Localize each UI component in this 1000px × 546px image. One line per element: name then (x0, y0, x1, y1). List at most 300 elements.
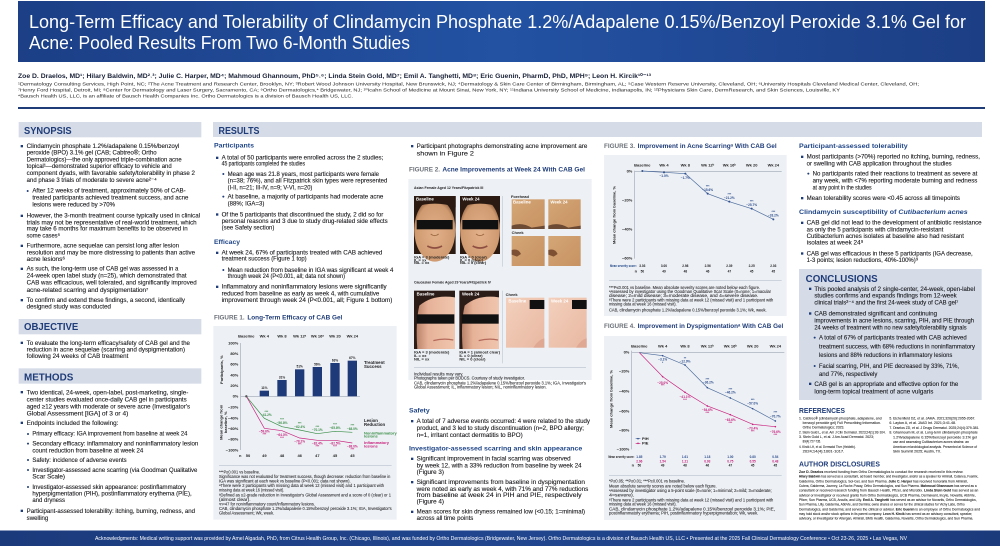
footnotes: figure 3: CAB, clindamycin phosphate 1.2%/adapalene 0.15%/benzoyl peroxide 3.1%; Wk, week. (609, 308, 767, 313)
text block: author disclosures: Zoe D. Draelos received funding from Ortho Dermatologics to conduct the research received in this review. (799, 469, 963, 474)
photo: face week 24: Week 24 (462, 197, 480, 202)
footnotes: figure 1: ***P≤0.001 vs baseline. (219, 469, 260, 474)
footnotes: figure 2 (414, 372, 586, 389)
text block: references: 3. Stein Gold L, et al. J Am Acad Dermatol. 2023; (799, 435, 874, 439)
text block: synopsis bullets: some cases⁵ (27, 233, 60, 240)
chart header: visit labels: Wk 4 (659, 163, 669, 168)
line chart: lesion reduction: *** (298, 422, 302, 426)
table: mean severity score: 3.03 (639, 264, 646, 268)
text block: synopsis bullets: CAB was efficacious, well tolerated, and significantly improved (27, 281, 197, 287)
chart header: visit labels: Wk 24 (347, 334, 359, 339)
line chart: lesion reduction: Reduction (364, 422, 386, 427)
text block: participants: (88%; IGA=3) (228, 201, 264, 207)
line chart: lesion reduction (218, 395, 398, 458)
table: mean severity score: 1.61 (682, 455, 688, 459)
line chart: dyspigmentation: *** (661, 384, 665, 388)
panel: results heading bar: RESULTS (218, 126, 260, 137)
line chart: dyspigmentation: *** (728, 421, 733, 425)
chart header: visit labels: Wk 16ᵃ (311, 334, 324, 339)
bar chart: treatment success: 40% (230, 372, 239, 377)
text block: author disclosures: may hold stock and/or stock options in its parent company. Leon H. Kircik has served as an advisory consultant, speaker, (799, 511, 972, 516)
text block: references: 5. Eichenfield DZ, et al. JAMA. 2021;326(20):2055-2067. (889, 417, 975, 421)
photo scores case 1: IL = 0 (clear) (460, 257, 484, 262)
line chart: acne scarring: *** (727, 193, 732, 197)
line chart: lesion reduction: n (239, 453, 242, 458)
line chart: lesion reduction: −70.1% (312, 428, 323, 432)
text block: participants: (I-II, n=21; III-IV, n=9; V-VI, n=20) (228, 186, 312, 192)
footnotes: figure 3: ᵃAssessed by investigator using the Goodman Qualitative Scar Scale (0=none; 1=macular (609, 289, 772, 294)
heading: figure 1: FIGURE 1. (214, 314, 245, 321)
text block: synopsis bullets: lesions were reduced by >70% (32, 203, 116, 209)
heading: figure 2: Acne Improvements at Week 24 With CAB Gel (442, 166, 585, 173)
line chart: lesion reduction: −100% (226, 447, 239, 452)
text block: scarring: (Figure 4) (417, 500, 444, 506)
text block: methods bullets: aged ≥12 years with moderate or severe acne (Investigator's (27, 404, 190, 410)
table: mean severity score: 50 (638, 463, 641, 467)
text block: conclusions bullets (809, 287, 975, 396)
panel: figure 3 (604, 143, 787, 330)
text block: references: 8. Ghannoum M, et al. Long-term clindamycin phosphate (889, 431, 978, 435)
photo crops: forehead and cheek (511, 194, 581, 266)
text block: synopsis bullets: 24-week open label study (n=25), which demonstrated that (27, 274, 187, 280)
text block: susceptibility: as only the 5 participants with clindamycin-resistant (807, 227, 944, 233)
text block: photographs bullet: shown in Figure 2 (417, 151, 475, 157)
text block: efficacy: Mean reduction from baseline in IGA was significant at week 4 (228, 268, 394, 274)
chart header: visit labels: Wk 12ᵃ (293, 334, 307, 339)
heading: author disclosures: AUTHOR DISCLOSURES (799, 462, 880, 469)
text block: synopsis bullets: trials may not be representative of real-world treatment, which (27, 220, 197, 226)
footnotes: figure 1: (almost clear). (219, 497, 251, 502)
footnotes: figure 4: 4=severe). (609, 492, 634, 497)
bar chart: treatment success: 100% (228, 340, 239, 345)
panel: methods (19, 368, 201, 522)
table: mean severity score: 2.56 (705, 264, 711, 268)
line chart: lesion reduction: *** (264, 410, 269, 414)
line chart: lesion reduction: −65.8% (330, 426, 341, 430)
text block: susceptibility: CAB gel was efficacious in these 5 participants (IGA decrease, (807, 251, 973, 257)
heading: conclusions: CONCLUSIONS (806, 274, 878, 285)
text block: tolerability: any week, with <7% reporting moderate burning and redness (813, 179, 977, 185)
line chart: dyspigmentation: −41.1% (680, 395, 691, 399)
photo scores case 2: NIL = 0 (clear) (459, 357, 486, 362)
affiliations: ¹Dermatology Consulting Services, High Point, NC; ²The Acne Treatment and Research Center, Brooklyn, NY; ³Robert Wood Johnson University Hospital, New Brunswick, NJ; ⁴Dermatology & Skin Care Center of Birmingham, Birmingham, AL; ⁵Case Western Reserve University, Cleveland, OH; ⁶University Hospitals Cleveland Medical Center, Cleveland, OH; (18, 82, 919, 86)
text block: tolerability: Most participants (>70%) reported no itching, burning, redness, (807, 155, 980, 161)
chart header: visit labels: Wk 8 (277, 334, 287, 339)
footnotes: figure 4: Mean absolute severity scores are noted below each figure. (609, 483, 717, 488)
text block: methods bullets: Global Assessment [IGA] of 3 or 4) (27, 412, 128, 418)
text block: author disclosures: Cutera, Galderma, Journey, La Roche-Posay, Ortho Dermatologics, and Sun Pharma. Mahmoud Ghannoum has served as a (799, 483, 977, 488)
text block: conclusions bullets: and 77%, respectively (819, 372, 877, 378)
text block: tolerability: at any point in the studies (813, 185, 872, 191)
line chart: acne scarring: −21.2% (724, 196, 735, 200)
text block: references: use and assessing Cutibacterium acnes strains: an (893, 440, 969, 444)
text block: author disclosures: Dermatologics, and Galderma; and serves the clinical or advisor. Eric Guenin is an employee of Ortho Dermatologics and (799, 506, 980, 511)
text block: methods bullets: Safety: incidence of adverse events (32, 458, 127, 464)
line chart: lesion reduction: Lesion (364, 418, 378, 423)
table: mean severity score: 49 (661, 463, 665, 467)
line chart: lesion reduction: 49 (262, 453, 267, 458)
table: mean severity score: Mean severity score: (608, 454, 634, 459)
text block: tolerability (801, 155, 980, 202)
line chart: lesion reduction: 45 (350, 453, 355, 458)
table: mean severity score: 0.80 (750, 455, 756, 459)
line chart: lesion reduction: −68.0% (347, 427, 358, 431)
text block: scarring: Mean scores for skin dryness remained low (<0.15; 1=minimal) (417, 510, 585, 516)
table: mean severity score: 50 (641, 269, 644, 273)
text block: methods bullets: center studies evaluated once-daily CAB gel in participants (27, 397, 187, 403)
text block: efficacy: through week 24 (P<0.001, all; data not shown) (228, 274, 345, 280)
table: mean severity score: 1.79 (660, 455, 666, 459)
text block: synopsis bullets: However, the 3-month treatment course typically used in clinical (27, 214, 200, 220)
line chart: lesion reduction: baseline, % (223, 411, 228, 433)
line chart: dyspigmentation: −20% (619, 368, 630, 373)
table: mean severity score: 48 (684, 269, 687, 273)
footnotes: figure 1 (219, 469, 392, 516)
line chart: dyspigmentation (608, 350, 784, 452)
photo scores case 2: NIL = xx (414, 357, 430, 362)
line chart: acne scarring: *** (750, 200, 754, 204)
photo crops: forehead and cheek: Cheek (512, 230, 524, 235)
text block: references: 6. Layton A, et al. JAAD Int. 2021;3:41-48. (889, 421, 956, 425)
line chart: dyspigmentation: −46.2% (725, 391, 736, 395)
text block: conclusions bullets: clinical trials²⁻⁴ and the first 24-week study of CAB gel⁷ (814, 300, 958, 307)
text block: participants: A total of 50 participants were enrolled across the 2 studies; (222, 156, 384, 162)
heading: safety: Safety (409, 408, 430, 415)
footer banner: Acknowledgments: Medical writing support was provided by Amel Algadah, PhD, from Citrus Health Group, Inc. (Chicago, Illinois), and was funded by Ortho Dermatologics (Bridgewater, New Jersey). Ortho Dermatologics is a division of Bausch Health US, LLC • Presented at the 2025 Fall Clinical Dermatology Conference • Oct 23-26, 2025 • Las Vegas, NV (95, 536, 907, 542)
text block: participants: At baseline, a majority of participants had moderate acne (228, 195, 384, 201)
text block: objective (21, 341, 191, 360)
heading: references: REFERENCES (799, 408, 845, 415)
text block: participants: personal reasons and 3 due to study drug-related side effects (222, 219, 388, 225)
footnotes: figure 4: postinflammatory erythema; PIH, postinflammatory hyperpigmentation; Wk, week. (609, 511, 758, 516)
text block: scarring: across all time points (417, 516, 473, 522)
chart header: visit labels: Wk 20 (747, 343, 759, 348)
text block: tolerability: No participants rated their reactions to treatment as severe at (813, 172, 978, 178)
text block: safety: product, and 3 led to study discontinuation (n=2, BPO allergy; (417, 426, 584, 432)
text block: tolerability: Mean tolerability scores were <0.45 across all timepoints (807, 196, 960, 202)
chart header: visit labels: Wk 24 (770, 343, 782, 348)
photo crops: forehead and cheek: Forehead (511, 194, 529, 199)
text block: methods bullets: swelling (27, 516, 48, 522)
line chart: lesion reduction: −60% (228, 426, 239, 431)
table: mean severity score: 45 (751, 463, 755, 467)
table: mean severity score: 1.00 (727, 455, 734, 459)
line chart: dyspigmentation: −73.4% (747, 426, 758, 430)
line chart: dyspigmentation: *** (773, 433, 778, 437)
line chart: acne scarring: −1.7% (681, 176, 690, 180)
table: mean severity score: 0.75 (727, 459, 734, 463)
chart header: visit labels: Wk 12ᵇ (701, 163, 715, 168)
photo scores case 2: IGA = 1 (almost clear) (459, 349, 501, 354)
photo: face week 24 (460, 196, 500, 262)
heading: scarring and skin appearance: Investigator-assessed scarring and skin appearance (409, 446, 583, 453)
line chart: lesion reduction: *** (333, 423, 338, 427)
footnotes: figure 2: CAB, clindamycin phosphate 1.2%/adapalene 0.15%/benzoyl peroxide 3.1%; IGA, Investigator's (414, 381, 586, 386)
text block: scarring: (Figure 3) (417, 470, 444, 476)
text block: safety: A total of 7 adverse events occurred: 4 were related to the study (417, 419, 590, 425)
text block: synopsis bullets: After 12 weeks of treatment, approximately 50% of CAB- (32, 189, 186, 195)
footnotes: figure 3: missing data at week 16 (missed visit). (609, 301, 677, 306)
photo scores case 2: IGA = 3 (moderate) (414, 349, 450, 354)
photo scores case 1 (414, 255, 487, 265)
text block: conclusions bullets: studies confirms and expands findings from 12-week (814, 294, 957, 300)
line chart: dyspigmentation: 0% (624, 350, 630, 355)
text block: references: 89(4):727-735. (803, 440, 821, 444)
table: mean severity score: 2.98 (682, 264, 689, 268)
footnotes: figure 1: Global Assessment; Wk, week. (219, 511, 274, 516)
line chart: lesion reduction: *** (315, 445, 320, 449)
bar chart: treatment success: 31% (279, 375, 285, 379)
table: mean severity score: Mean severity score: (610, 263, 637, 268)
line chart: acne scarring: −33.2% (768, 213, 779, 217)
text block: author disclosures: consultant or received research funding from Bausch Health, Pfizer, and Microbix. Linda Stein Gold has served as an (799, 488, 978, 493)
text block: objective: reduction in acne sequelae (scarring and dyspigmentation) (27, 347, 185, 353)
photo scores case 1: NIL = 0 (clear) (460, 260, 487, 265)
line chart: lesion reduction: 47 (315, 453, 320, 458)
text block: synopsis bullets: peroxide (BPO) 3.1% gel (CAB; Cabtreo®; Ortho (27, 149, 157, 156)
legend: PIH and PIE: PIE (642, 441, 649, 446)
table: mean severity score: 3.00 (661, 264, 667, 268)
text block: efficacy: reduced from baseline as early as week 4, with cumulative (222, 291, 380, 297)
text block: methods bullets: Secondary efficacy: inflammatory and noninflammatory lesion (32, 442, 198, 448)
footnotes: figure 2: Individual results may vary. (414, 372, 463, 377)
text block: conclusions bullets: CAB gel is an appropriate and effective option for the (814, 382, 959, 388)
photo: face baseline (414, 196, 456, 262)
text block: references: Skin Summit 2025; Austin, TX. (893, 449, 941, 453)
text block: conclusions bullets: treatment success, with 68% reductions in noninflammatory (819, 345, 975, 351)
text block: author disclosures: Galderma, Ortho Dermatologics, Sol-Gel, and Sun Pharma. Julie C. Harper has received honoraria from Almirall, (799, 478, 968, 483)
text block: efficacy: treatment success (Figure 1 top) (222, 257, 307, 263)
line chart: dyspigmentation: *** (705, 411, 710, 415)
panel: synopsis (19, 122, 201, 310)
line chart: lesion reduction: −88.0% (347, 445, 358, 449)
line chart: dyspigmentation: *** (751, 398, 755, 402)
footnotes: figure 2: Global Assessment; IL, inflammatory lesion; NIL, noninflammatory lesion. (414, 384, 547, 389)
text block: scarring: Significant improvement in facial scarring was observed (417, 457, 571, 463)
bar chart: treatment success: 63% (332, 358, 338, 362)
text block: conclusions bullets: Facial scarring, PIH, and PIE decreased by 33%, 71%, (819, 364, 959, 370)
title: Acne: Pooled Results From Two 6-Month Studies (29, 33, 410, 53)
text block: references: 1.2%/adapalene 0.15%/benzoyl peroxide 3.1% gel (893, 436, 977, 440)
photo crops: cheek case 2: Week 24 (551, 299, 569, 304)
heading: synopsis: SYNOPSIS (24, 126, 72, 137)
chart header: visit labels (634, 163, 780, 168)
text block: objective: following 24 weeks of CAB treatment (27, 354, 129, 360)
line chart: dyspigmentation: ** (684, 356, 687, 360)
line chart: acne scarring: −20% (622, 198, 633, 203)
text block: photographs bullet: Participant photographs demonstrating acne improvement are (417, 144, 588, 150)
line chart: dyspigmentation: −70.7% (770, 414, 781, 418)
text block: synopsis bullets: As such, the long-term use of CAB gel was assessed in a (27, 267, 179, 273)
photo scores case 1: IL = xx (414, 257, 427, 262)
line chart: dyspigmentation: *** (728, 387, 733, 391)
photo case 2 (414, 280, 587, 363)
line chart: lesion reduction: *** (350, 448, 355, 452)
text block: scarring (411, 457, 588, 522)
line chart: acne scarring: *** (771, 210, 776, 214)
text block: references: Ortho Dermatologics; 2023. (803, 426, 844, 430)
table: mean severity score: 1.18 (704, 455, 711, 459)
footnotes: figure 1: missing data at week 16 (missed visit). (219, 488, 284, 493)
line chart: acne scarring: Mean change from baseline, % (612, 186, 617, 244)
line chart: dyspigmentation: −36.2% (703, 381, 714, 385)
panel: objective (19, 319, 201, 360)
line chart: lesion reduction: 50 (246, 453, 251, 458)
photo: profile week 24 (459, 291, 499, 349)
text block: references: American microbiological analysis. Presented at Science of (893, 445, 978, 449)
heading: objective: OBJECTIVE (24, 322, 79, 333)
legend: PIH and PIE (636, 436, 649, 446)
panel: conclusions (799, 269, 982, 400)
text block: conclusions bullets: 24 weeks of treatment with no new safety/tolerability signals (814, 326, 967, 332)
line chart: dyspigmentation: *** (683, 398, 688, 402)
bar chart: treatment success: Participants, % (219, 355, 224, 384)
line chart: lesion reduction: Inflammatory (364, 440, 390, 445)
panel: tolerability and susceptibility (799, 143, 982, 264)
text block: synopsis bullets: acne-related scarring and dyspigmentation⁷ (27, 287, 148, 294)
text block: methods bullets (21, 390, 198, 522)
line chart: lesion reduction: −20% (228, 404, 239, 409)
line chart: acne scarring: −15.6% (702, 188, 713, 192)
table: mean severity score: 2.06 (636, 459, 643, 463)
line chart: dyspigmentation: −12.9% (680, 360, 691, 364)
photo scores case 2 (414, 349, 501, 362)
panel: figure 4 (604, 336, 787, 520)
heading: tolerability: Participant-assessed tolerability (799, 143, 908, 150)
heading: figure 3: Improvement in Acne Scarringᵃ With CAB Gel (638, 143, 777, 150)
table: mean severity score (610, 263, 777, 273)
bar chart: treatment success: 0% (233, 394, 239, 399)
text block: synopsis bullets: acne lesions⁶ (27, 256, 66, 263)
chart header: visit labels: Baseline (238, 334, 255, 339)
line chart: dyspigmentation: −60% (619, 408, 630, 413)
text block: synopsis bullets: treated participants achieved treatment success, and acne (32, 196, 189, 202)
table: mean severity score: 1.85 (636, 455, 643, 459)
table: mean severity score: 2.25 (749, 264, 755, 268)
table: mean severity score: 0.55 (750, 459, 756, 463)
bar chart: treatment success: Treatment (364, 360, 385, 365)
text block: methods bullets: Endpoints included the following: (27, 421, 119, 427)
table: mean severity score: 1.54 (660, 459, 666, 463)
line chart: lesion reduction: 46 (297, 453, 303, 458)
chart header: visit labels: Wk 4 (658, 343, 668, 348)
text block: methods bullets: Two identical, 24-week, open-label, post-marketing, single- (27, 390, 188, 396)
photo crops: cheek case 2: Cheek (506, 292, 518, 297)
panel: safety and scarring (409, 408, 590, 522)
footnotes: figure 2: Photographs taken per BDDCS. Courtesy of study investigator. (414, 376, 525, 381)
text block: photographs bullet (411, 144, 588, 157)
text block: susceptibility: isolates at week 24⁹ (807, 240, 864, 247)
table: mean severity score: 49 (662, 269, 666, 273)
chart header: visit labels: Wk 12ᵇ (701, 343, 714, 348)
footnotes: figure 4: ᵇThere were 2 participants with missing data at week 12 (missed visit) and 1 participant with (609, 497, 774, 502)
table: mean severity score: 2.03 (770, 264, 777, 268)
line chart: lesion reduction: *** (280, 417, 285, 421)
authors (18, 72, 919, 98)
text block: methods bullets: and dryness (32, 498, 65, 504)
photo case 2: Caucasian Female Aged 29 Years/Fitzpatrick IV (414, 280, 491, 285)
line chart: dyspigmentation: −40% (619, 389, 630, 394)
footnotes: figure 3: disease; 2=mild disease; 3=moderate disease, and 4=severe disease. (609, 293, 758, 298)
text block: scarring: Significant improvements from baseline in dyspigmentation (417, 480, 585, 486)
chart header: visit labels: Wk 20 (329, 334, 342, 339)
footnotes: figure 3: ᵇThere were 2 participants with missing data at week 12 (missed visit) and 1 participant with (609, 297, 774, 302)
heading: participants: Participants (214, 143, 254, 150)
line chart: lesion reduction: −82.4% (312, 442, 323, 446)
text block: synopsis bullets: and phase 3 trials of moderate to severe acne²⁻⁴ (27, 177, 157, 184)
line chart: lesion reduction: −62.4% (294, 425, 305, 429)
chart header: visit labels (238, 334, 359, 339)
bar chart: treatment success: 80% (230, 351, 239, 356)
text block: conclusions bullets: CAB demonstrated significant and continuing (814, 312, 937, 318)
chart header: visit labels: Baseline (631, 343, 648, 348)
text block: participants: Mean age was 21.8 years, most participants were female (228, 172, 380, 178)
line chart: acne scarring: −60% (622, 256, 633, 261)
text block: author disclosures (799, 469, 980, 521)
text block: conclusions bullets: improvements in acne lesions, scarring, PIH, and PIE through (814, 319, 974, 325)
heading: methods: METHODS (24, 372, 74, 383)
line chart: lesion reduction: *** (333, 445, 338, 449)
footnotes: figure 1: ᵃThere were 2 participants with missing data at week 12 (missed visit) and 1 participant with (219, 483, 385, 488)
text block: efficacy: improvement through week 24 (P<0.001, all; Figure 1 bottom) (222, 298, 392, 304)
table: mean severity score: 46 (706, 269, 710, 273)
chart header: visit labels (631, 343, 782, 348)
line chart: lesion reduction: 48 (280, 453, 285, 458)
footnotes: figure 4: missing data at week 16 (missed visit). (609, 502, 677, 507)
line chart: lesion reduction: −78.2% (294, 440, 305, 444)
line chart: lesion reduction: lesions (364, 444, 379, 449)
bar chart: treatment success: Success (364, 364, 382, 369)
heading: figure 3: FIGURE 3. (604, 143, 635, 150)
text block: conclusions bullets: lesions and 88% reductions in inflammatory lesions (819, 353, 952, 359)
text block: conclusions bullets: This pooled analysis of 2 single-center, 24-week, open-label (814, 287, 975, 293)
line chart: lesion reduction: *** (280, 436, 285, 440)
footnotes: figure 3: ***P≤0.001 vs baseline. Mean absolute severity scores are noted below each figure. (609, 285, 760, 290)
line chart: dyspigmentation: −3.1% (658, 358, 667, 362)
photo: profile baseline (414, 291, 455, 349)
table: mean severity score: 47 (729, 463, 732, 467)
text block: safety (411, 419, 590, 439)
line chart: acne scarring: *** (706, 184, 710, 188)
line chart: lesion reduction: *** (350, 424, 355, 428)
text block: synopsis bullets: Furthermore, acne sequelae can persist long after lesion (27, 244, 179, 250)
photo: profile week 24: Week 24 (462, 291, 480, 296)
bar chart: treatment success: 56% (314, 362, 321, 366)
panel: results heading bar (213, 122, 982, 137)
text block: methods bullets: Participant-assessed tolerability: itching, burning, redness, and (27, 509, 195, 515)
text block: objective: To evaluate the long-term efficacy/safety of CAB gel and the (27, 341, 191, 347)
line chart: lesion reduction: −59.6% (259, 430, 270, 434)
heading: efficacy: Efficacy (214, 239, 240, 246)
text block: safety: n=1, irritant contact dermatitis to BPO) (417, 433, 523, 439)
text block: synopsis bullets: To confirm and extend these findings, a second, identically (27, 298, 185, 304)
bar chart: treatment success: 51% (297, 365, 303, 369)
text block: references: benzoyl peroxide gel) Full Prescribing Information. (803, 421, 881, 425)
text block: synopsis bullets: Dermatologics)—the only approved triple-combination acne (27, 157, 182, 163)
line chart: lesion reduction: −56.8% (277, 421, 288, 425)
chart header: visit labels: Wk 20 (746, 163, 758, 168)
table: mean severity score: 46 (706, 463, 709, 467)
line chart: dyspigmentation: * (662, 361, 664, 365)
line chart: lesion reduction: lesions (364, 433, 379, 438)
bar chart: treatment success: 60% (230, 362, 239, 367)
chart header: visit labels: Wk 16ᵇ (724, 343, 737, 348)
panel: references and disclosures (799, 408, 980, 521)
footnotes: figure 4 (609, 478, 775, 516)
table: mean severity score: 48 (683, 463, 687, 467)
text block: references (799, 417, 979, 453)
table: mean severity score: 45 (774, 463, 777, 467)
